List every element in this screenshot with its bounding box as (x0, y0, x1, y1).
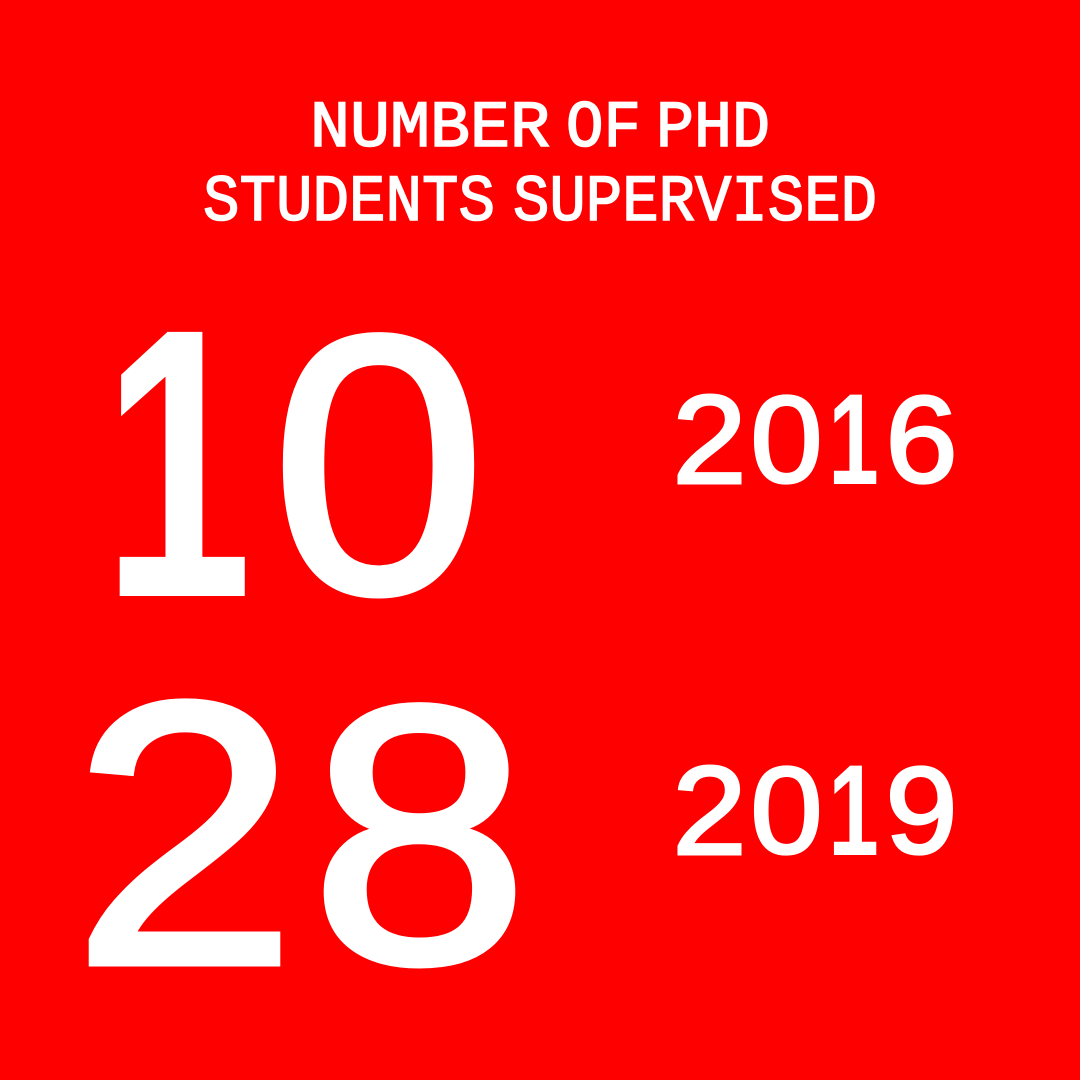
big number: 10: 0 (271, 260, 486, 669)
year label: 2019: 9 (885, 741, 958, 879)
year label: 2016: 2 (672, 368, 747, 510)
title: NUMBER (310, 91, 550, 166)
title: STUDENTS (203, 165, 495, 240)
year label: 2016: 0 (750, 370, 823, 508)
big number: 28 (72, 626, 529, 1043)
year label: 2016: 6 (885, 370, 958, 508)
big number: 10: 1 (103, 250, 252, 678)
big number: 10 (103, 250, 486, 678)
year label: 2016 (672, 366, 958, 512)
year label: 2016: 1 (828, 366, 879, 512)
year label: 2019: 2 (672, 739, 747, 881)
title: SUPERVISED (513, 165, 877, 240)
big number: 28: 8 (310, 631, 529, 1040)
year label: 2019: 0 (750, 741, 823, 879)
title: OF (566, 91, 641, 166)
year label: 2019: 1 (828, 737, 879, 883)
title (203, 91, 877, 240)
year label: 2019 (672, 737, 958, 883)
title: PHD (656, 91, 770, 166)
big number: 28: 2 (72, 626, 297, 1043)
